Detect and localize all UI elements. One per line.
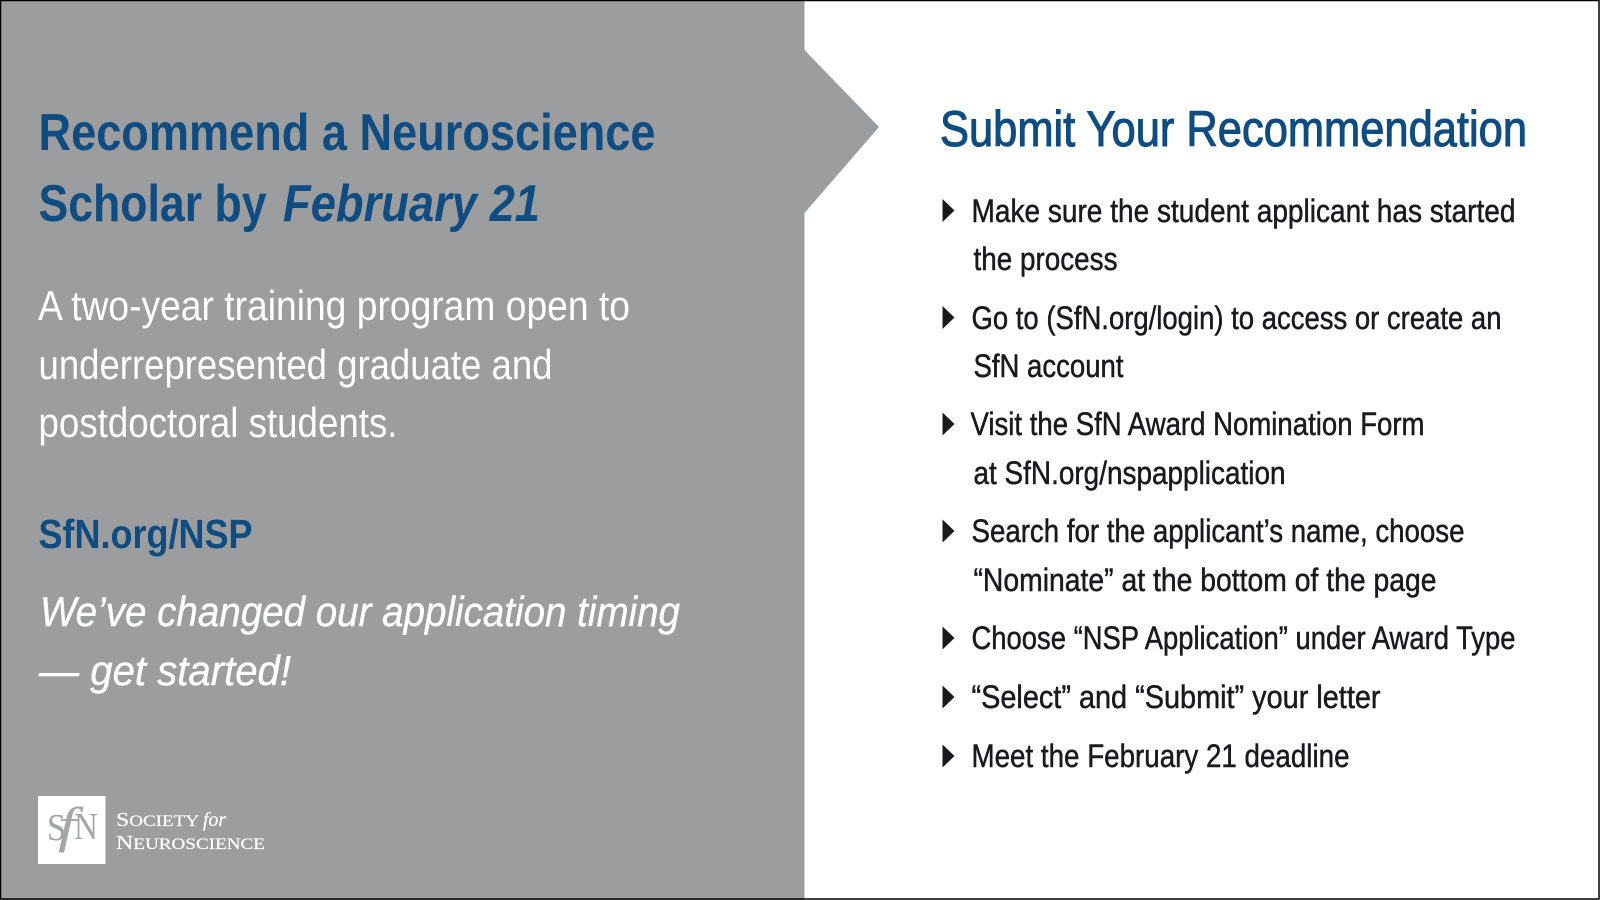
text block: program description [38, 282, 630, 446]
step 5: Choose “NSP Application” under Award Type [972, 620, 1516, 656]
icon: SfN logo mark: N [74, 806, 98, 848]
heading: recommend a neuroscience scholar: Recommend a Neuroscience [38, 104, 656, 162]
step 4 [942, 513, 1464, 598]
step 7: Meet the February 21 deadline [972, 738, 1350, 774]
text block: program description: postdoctoral students. [38, 399, 398, 446]
heading: submit your recommendation: Submit Your Recommendation [940, 101, 1527, 157]
panel: grey left panel with arrow [0, 0, 879, 900]
step 6: “Select” and “Submit” your letter [972, 679, 1381, 715]
text block: timing note: — get started! [38, 647, 291, 694]
step 2: SfN account [974, 348, 1124, 384]
wordmark: NEUROSCIENCE [116, 832, 265, 854]
list: submission steps [942, 193, 1516, 774]
heading: recommend a neuroscience scholar: Scholar by [38, 175, 267, 233]
step 2 [942, 300, 1502, 384]
icon: SfN logo mark: f [58, 797, 84, 853]
step 1: Make sure the student applicant has started [972, 193, 1516, 229]
step 1 [942, 193, 1516, 277]
logo: Society for Neuroscience [38, 796, 265, 864]
text block: timing note: We’ve changed our application timing [40, 588, 680, 635]
heading: recommend a neuroscience scholar [38, 104, 656, 233]
step 1: the process [974, 241, 1118, 277]
step 3: at SfN.org/nspapplication [974, 455, 1286, 491]
step 2: Go to (SfN.org/login) to access or create an [972, 300, 1502, 336]
icon: SfN logo mark [38, 796, 106, 864]
text block: program description: A two-year training program open to [38, 282, 630, 329]
wordmark: for [203, 809, 226, 831]
icon: SfN logo mark: S [47, 807, 66, 849]
wordmark: SOCIETY [116, 809, 200, 831]
heading: recommend a neuroscience scholar: February 21 [283, 175, 540, 233]
text block: timing note [38, 588, 680, 694]
link: SfN.org/NSP: SfN.org/NSP [38, 511, 252, 557]
step 4: “Nominate” at the bottom of the page [974, 562, 1436, 598]
text block: program description: underrepresented graduate and [38, 341, 552, 388]
wordmark [116, 809, 265, 854]
step 4: Search for the applicant’s name, choose [972, 513, 1464, 549]
step 3 [942, 406, 1424, 491]
step 3: Visit the SfN Award Nomination Form [970, 406, 1424, 442]
